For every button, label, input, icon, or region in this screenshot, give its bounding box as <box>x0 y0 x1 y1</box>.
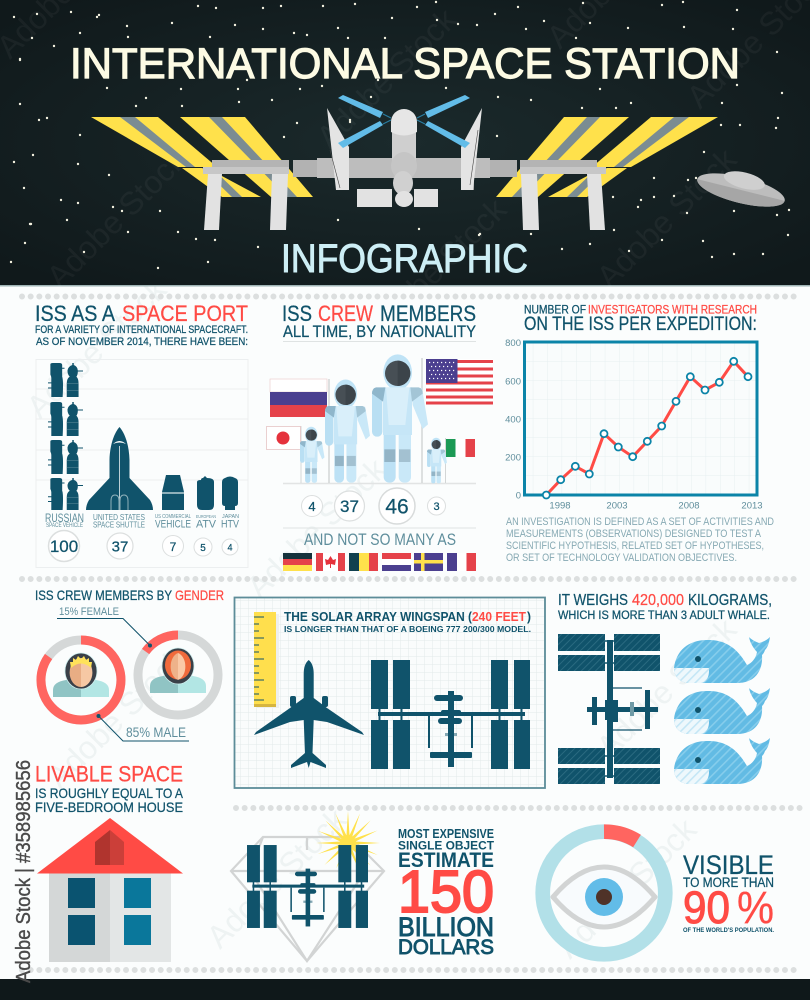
ring chart <box>543 832 665 954</box>
title: INTERNATIONAL SPACE STATION <box>70 40 740 88</box>
left solar arrays <box>91 117 313 230</box>
icon: commercial vehicle <box>162 475 184 510</box>
panel: wingspan <box>234 598 545 788</box>
heading: AS OF NOVEMBER 2014, THERE HAVE BEEN: <box>36 336 248 348</box>
text: definition: OR SET OF TECHNOLOGY VALIDATION OBJECTIVES. <box>506 552 737 564</box>
watermark caption: Adobe Stock | #358985656 <box>13 760 35 983</box>
text: cost <box>398 827 495 959</box>
crew counts: 37 <box>340 497 359 516</box>
panel: gender <box>35 587 224 741</box>
vehicle labels: SPACE VEHICLE <box>46 523 83 529</box>
faint stock watermarks on the page <box>19 270 744 965</box>
small flags <box>283 553 476 571</box>
icon: airplane <box>254 660 364 768</box>
axis labels: 2003 <box>606 500 628 512</box>
icon: house <box>37 818 183 962</box>
panel: weight <box>558 592 772 784</box>
vehicle labels: VEHICLE <box>155 518 191 530</box>
axis labels <box>505 338 763 512</box>
faint stock watermarks on the page: Adobe Stock <box>239 450 394 605</box>
text: visible: OF THE WORLD'S POPULATION. <box>683 927 774 934</box>
vehicle labels <box>45 511 240 530</box>
heading: NUMBER OF <box>524 304 586 316</box>
icon: whales <box>674 637 770 784</box>
text: definition <box>506 516 774 564</box>
faint stock watermarks on the page: Adobe Stock <box>199 800 354 955</box>
faint stock watermarks on the page: Adobe Stock <box>549 810 704 965</box>
faint stock watermarks on the header <box>0 0 810 345</box>
vehicle counts: 37 <box>112 538 128 556</box>
callout: male: 85% MALE <box>126 724 186 740</box>
heading <box>284 610 531 634</box>
vehicle counts: 7 <box>170 540 177 554</box>
heading <box>282 301 476 342</box>
axis labels: 600 <box>505 376 521 388</box>
female ring <box>138 635 218 715</box>
heading: THE SOLAR ARRAY WINGSPAN ( <box>284 610 473 624</box>
panel: crew nationality <box>266 301 493 571</box>
vehicle labels: RUSSIAN <box>45 511 84 525</box>
data line <box>546 361 748 495</box>
heading <box>558 592 772 622</box>
text: not so many: AND NOT SO MANY AS <box>304 531 456 549</box>
center modules <box>357 109 438 207</box>
vehicle labels: JAPAN <box>222 514 239 520</box>
vehicle labels: HTV <box>221 518 240 530</box>
heading: KILOGRAMS, <box>688 592 772 609</box>
space station illustration <box>91 95 718 230</box>
heading: ALL TIME, BY NATIONALITY <box>283 323 476 341</box>
panel: livable space <box>35 762 184 962</box>
icon: hatched station <box>558 634 660 784</box>
text: definition: MEASUREMENTS (OBSERVATIONS) DESIGNED TO TEST A <box>506 528 762 540</box>
blue arms <box>338 95 470 148</box>
callout: female: 15% FEMALE <box>59 606 119 618</box>
heading: ) <box>527 610 531 624</box>
male ring <box>41 640 121 720</box>
text: cost: MOST EXPENSIVE <box>398 827 494 841</box>
heading <box>524 304 757 335</box>
vehicle counts <box>48 530 238 562</box>
panel: space port <box>35 301 248 568</box>
vehicle labels: UNITED STATES <box>93 512 145 522</box>
icon: sun burst <box>316 811 380 873</box>
heading: ISS AS A <box>35 301 115 326</box>
heading: IS ROUGHLY EQUAL TO A <box>35 785 184 801</box>
panel: visibility <box>543 832 774 954</box>
heading <box>35 301 248 348</box>
heading: FOR A VARIETY OF INTERNATIONAL SPACECRAFT. <box>35 324 248 336</box>
heading: WHICH IS MORE THAN 3 ADULT WHALE. <box>558 610 770 622</box>
chart frame <box>36 360 248 568</box>
heading: IT WEIGHS <box>558 592 628 609</box>
heading: LIVABLE SPACE <box>35 762 183 786</box>
icon: ruler <box>254 612 279 708</box>
icon: male astronaut <box>53 653 109 697</box>
heading: SPACE PORT <box>122 301 248 326</box>
dotted dividers <box>22 296 800 970</box>
text: cost: BILLION <box>398 912 494 942</box>
text: visible: TO MORE THAN <box>683 875 774 890</box>
heading: FIVE-BEDROOM HOUSE <box>35 799 183 815</box>
text: visible: 90 <box>683 882 730 933</box>
heading: ON THE ISS PER EXPEDITION: <box>524 314 757 335</box>
callout: female <box>57 606 152 648</box>
icon: eye <box>553 867 655 927</box>
heading: ISS <box>282 301 312 326</box>
crew counts: 4 <box>308 499 316 514</box>
icon: flying saucer <box>694 162 789 214</box>
icon: diamond <box>231 837 384 961</box>
faint stock watermarks on the page: Adobe Stock <box>19 270 174 425</box>
icon: female astronaut <box>150 648 206 693</box>
radiator panels <box>327 108 482 190</box>
faint stock watermarks on the page: Adobe Stock <box>589 610 744 765</box>
heading: 240 FEET <box>472 610 526 624</box>
text: cost: ESTIMATE <box>398 849 494 872</box>
faint stock watermarks on the header: Adobe Stock <box>359 190 514 345</box>
heading: INVESTIGATORS WITH RESEARCH <box>588 304 757 316</box>
heading <box>35 762 184 815</box>
data points <box>543 358 752 498</box>
faint stock watermarks on the header: Adobe Stock <box>309 0 464 155</box>
flag: russia <box>270 379 327 417</box>
vehicle counts: 5 <box>200 543 206 554</box>
panel: investigators chart <box>505 304 774 564</box>
crew counts: 46 <box>385 496 409 518</box>
central truss <box>293 147 517 190</box>
text: visible: % <box>737 882 774 933</box>
heading: IS LONGER THAN THAT OF A BOEING 777 200/300 MODEL. <box>284 624 531 634</box>
flag: italy <box>446 439 475 457</box>
text: cost: DOLLARS <box>398 935 494 959</box>
faint stock watermarks on the header: Adobe Stock <box>39 140 194 295</box>
vehicle labels: ATV <box>196 518 217 530</box>
icon: station silhouette <box>371 660 530 769</box>
vehicle counts: 4 <box>227 542 233 552</box>
heading: MEMBERS <box>380 301 476 326</box>
grid frame <box>234 598 545 788</box>
vehicle labels: SPACE SHUTTLE <box>93 520 145 530</box>
vehicle labels: US COMMERCIAL <box>155 514 191 520</box>
right solar arrays <box>496 117 718 230</box>
astronauts <box>300 354 447 483</box>
axis labels: 2008 <box>678 500 700 512</box>
header panel <box>0 0 810 345</box>
flag poles and ground <box>283 358 476 484</box>
subtitle: INFOGRAPHIC <box>281 237 528 281</box>
stars <box>11 2 789 268</box>
axis labels: 0 <box>516 490 521 502</box>
line chart <box>505 338 763 512</box>
vehicle counts: 100 <box>50 537 78 556</box>
axis labels: 800 <box>505 338 521 349</box>
icon: space shuttle <box>86 427 153 510</box>
vehicle labels: EUROPEAN <box>196 514 216 519</box>
crew counts <box>302 488 446 524</box>
flag: usa <box>426 359 493 404</box>
footer bar <box>0 979 810 1000</box>
heading: ISS CREW MEMBERS BY <box>35 587 173 603</box>
callout: male <box>96 714 189 741</box>
icon: russian space vehicles <box>48 363 83 510</box>
heading: 420,000 <box>632 592 684 609</box>
axis labels: 400 <box>505 414 521 426</box>
faint stock watermarks on the header: Adobe Stock <box>589 140 744 295</box>
axis labels: 200 <box>505 452 521 464</box>
axis labels: 2013 <box>741 500 763 512</box>
faint stock watermarks on the page: Adobe Stock <box>539 330 694 485</box>
flag: japan <box>266 426 300 450</box>
crew counts: 3 <box>433 501 440 513</box>
text: cost: 150 <box>398 859 494 925</box>
heading: GENDER <box>175 587 224 603</box>
panel: cost <box>231 811 495 961</box>
icon: station <box>247 845 368 928</box>
icon: ATV <box>197 476 214 510</box>
axis labels: 1998 <box>549 500 571 512</box>
text: visible <box>683 850 774 934</box>
heading: CREW <box>318 301 373 326</box>
text: visible: VISIBLE <box>683 850 774 880</box>
icon: HTV <box>222 476 238 510</box>
text: cost: SINGLE OBJECT <box>398 838 495 852</box>
faint stock watermarks on the page: Adobe Stock <box>39 640 194 795</box>
